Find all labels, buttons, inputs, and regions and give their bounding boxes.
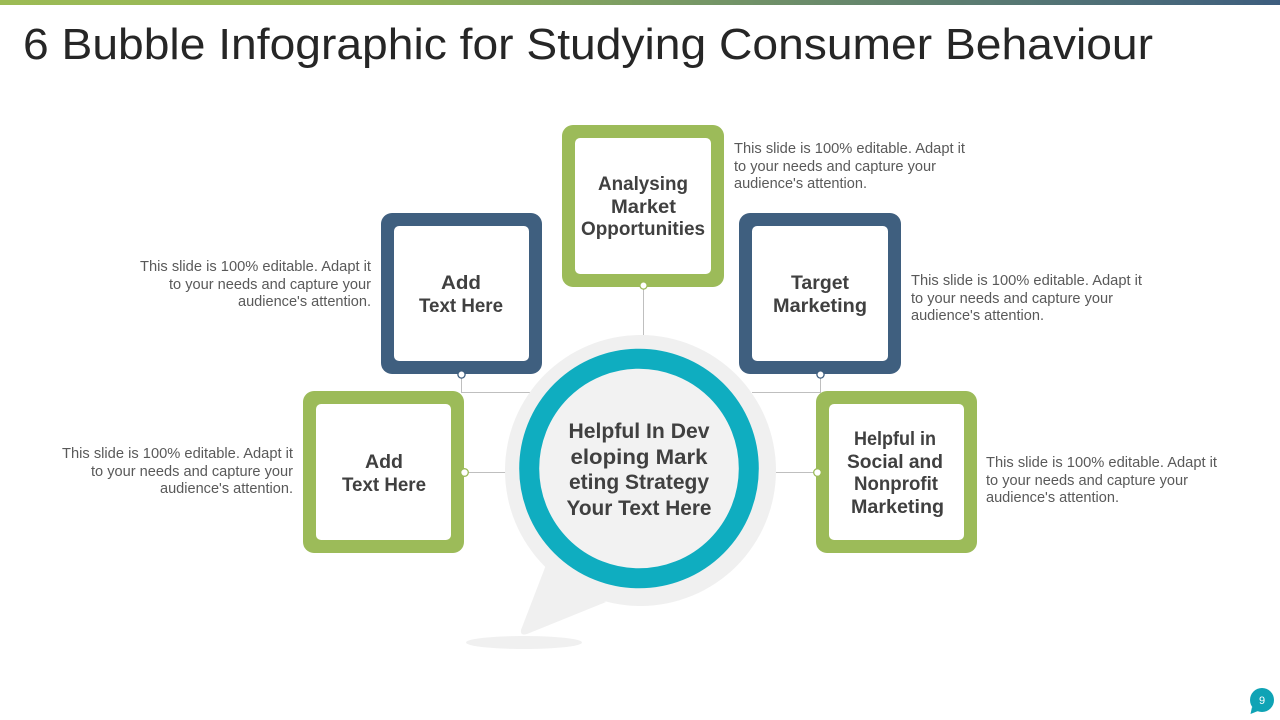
- panel: helpful in social and nonprofit marketing: Nonprofit: [854, 473, 938, 495]
- description: left lower: audience's attention.: [160, 481, 293, 497]
- description: left upper: to your needs and capture your: [169, 277, 371, 293]
- panel: add text here, lower left: Add: [365, 451, 403, 473]
- central text: Your Text Here: [566, 497, 712, 520]
- panel: analysing market opportunities: Market: [611, 196, 677, 218]
- description: right lower: to your needs and capture your: [986, 473, 1188, 489]
- panel: helpful in social and nonprofit marketing: Marketing: [851, 496, 944, 518]
- central text: [566, 420, 712, 520]
- title: 6 Bubble Infographic for Studying Consumer Behaviour: [23, 20, 1153, 69]
- page number badge: 9: [1259, 695, 1265, 707]
- description: right upper: This slide is 100% editable. Adapt it: [911, 273, 1142, 289]
- central text: Helpful In Dev: [568, 420, 710, 443]
- panel: analysing market opportunities: [562, 125, 724, 287]
- bubble shadow: [466, 636, 582, 649]
- description: right upper: to your needs and capture your: [911, 291, 1113, 307]
- description: left upper: [140, 259, 371, 310]
- panel: helpful in social and nonprofit marketing: [816, 391, 977, 553]
- description: right upper: [911, 273, 1142, 324]
- description: left lower: [62, 446, 293, 497]
- description: left lower: This slide is 100% editable. Adapt it: [62, 446, 293, 462]
- central text: eting Strategy: [569, 471, 709, 494]
- top gradient bar: [0, 0, 1280, 5]
- panel: add text here, lower left: [303, 391, 464, 553]
- description: left lower: to your needs and capture your: [91, 464, 293, 480]
- bubble tail: [521, 565, 606, 634]
- central text: eloping Mark: [570, 446, 708, 469]
- panel: add text here, upper left: [381, 213, 542, 374]
- description: top right: to your needs and capture your: [734, 159, 936, 175]
- panel: add text here, upper left: Add: [441, 272, 481, 294]
- description: top right: [734, 141, 965, 192]
- panel: target marketing: Target: [791, 272, 849, 294]
- connector lines: [462, 287, 820, 472]
- description: right lower: audience's attention.: [986, 490, 1119, 506]
- description: top right: This slide is 100% editable. Adapt it: [734, 141, 965, 157]
- panel: helpful in social and nonprofit marketing: Helpful in: [854, 428, 936, 450]
- description: right lower: This slide is 100% editable. Adapt it: [986, 455, 1217, 471]
- page number badge: [1250, 688, 1274, 714]
- panel: analysing market opportunities: Analysing: [598, 173, 688, 195]
- description: left upper: This slide is 100% editable. Adapt it: [140, 259, 371, 275]
- panel: analysing market opportunities: Opportunities: [581, 218, 705, 240]
- central speech bubble: [466, 335, 776, 649]
- teal ring: [529, 359, 749, 578]
- panel: add text here, lower left: Text Here: [342, 474, 426, 496]
- description: right upper: audience's attention.: [911, 308, 1044, 324]
- description: right lower: [986, 455, 1217, 506]
- panel: target marketing: Marketing: [773, 295, 867, 317]
- panel: helpful in social and nonprofit marketing: Social and: [847, 451, 943, 473]
- bubble body: [505, 335, 776, 606]
- description: left upper: audience's attention.: [238, 294, 371, 310]
- description: top right: audience's attention.: [734, 176, 867, 192]
- connector dots: [458, 282, 824, 476]
- panel: add text here, upper left: Text Here: [419, 295, 503, 317]
- panel: target marketing: [739, 213, 901, 374]
